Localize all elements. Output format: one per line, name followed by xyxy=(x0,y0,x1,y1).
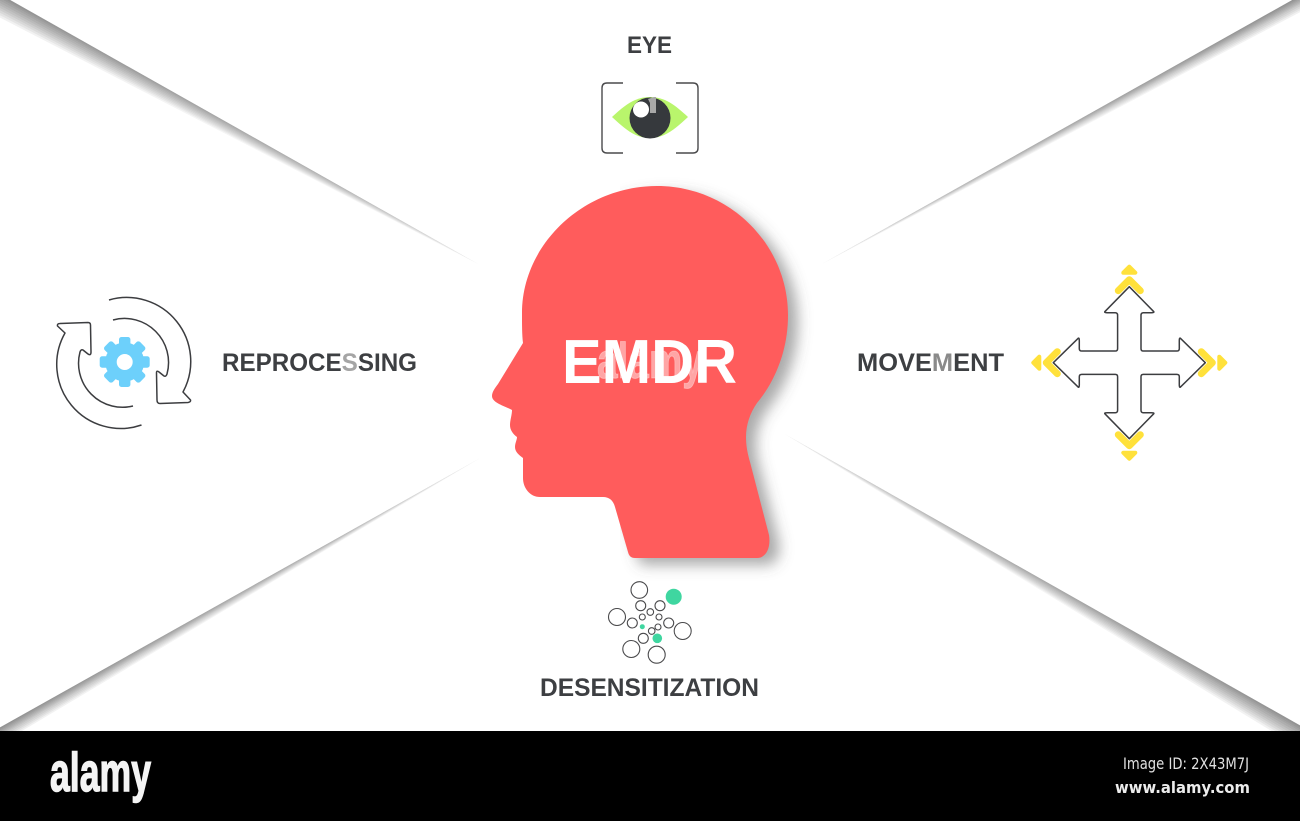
icon: dispersing circles xyxy=(608,582,691,663)
title: EMDR: EMDR xyxy=(562,328,737,397)
head shadow xyxy=(620,184,806,574)
fold shadow: bottom left xyxy=(0,457,482,750)
website: www.alamy.com xyxy=(1115,778,1250,797)
icon: four-way arrow xyxy=(1033,267,1225,459)
icon: gear xyxy=(100,337,150,387)
footer logo: alamy xyxy=(50,741,151,803)
watermark on head: alamy xyxy=(597,333,703,389)
heading: reprocessing: REPROCESSING xyxy=(222,349,417,377)
fold shadow: top right xyxy=(820,0,1300,265)
footer bar xyxy=(0,731,1300,821)
heading: eye: EYE xyxy=(627,32,672,59)
head silhouette xyxy=(492,186,788,558)
icon: reprocessing arrows and gear xyxy=(57,297,191,428)
heading: movement: MOVEMENT xyxy=(857,349,1004,377)
fold shadow: bottom right xyxy=(783,433,1300,754)
yellow direction markers xyxy=(1033,267,1225,459)
heading: desensitization: DESENSITIZATION xyxy=(540,674,759,702)
icon: eye in viewfinder xyxy=(602,83,698,153)
fold shadow: top left xyxy=(0,0,480,265)
image id: Image ID: 2X43M7J xyxy=(1123,754,1249,773)
